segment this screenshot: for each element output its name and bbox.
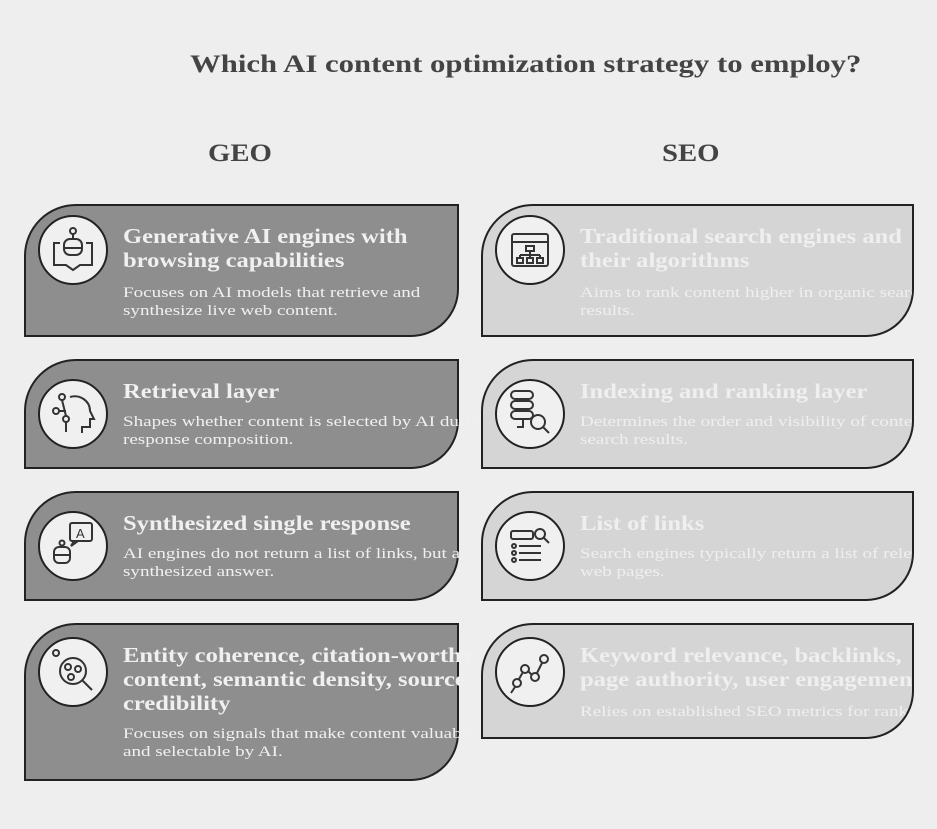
panel: GEO card 2 [24,359,459,469]
text: description: Shapes whether content is selected by AI during [123,414,490,430]
text: title: Keyword relevance, backlinks, [580,643,902,667]
text: title [580,224,902,272]
panel: SEO card 4 [481,623,914,739]
panel: GEO card 3 [24,491,459,601]
text: description [123,414,490,448]
text: title [123,643,474,715]
icon: robot book [38,215,108,285]
text: description [580,546,914,580]
icon: head network [38,379,108,449]
text: description: search results. [580,432,688,448]
text: title: browsing capabilities [123,248,344,272]
text: title: their algorithms [580,248,749,272]
text: title: Entity coherence, citation-worthy [123,643,474,667]
text: description: Focuses on signals that make content valuable [123,726,475,742]
icon: magnifier network [38,637,108,707]
text: description: AI engines do not return a list of links, but a [123,546,460,562]
panel: GEO card 1 [24,204,459,337]
icon: browser sitemap [495,215,565,285]
text: title: Synthesized single response [123,511,411,535]
icon: list search [495,511,565,581]
title: Which AI content optimization strategy to employ? [190,51,861,78]
text: description: Focuses on AI models that retrieve and [123,285,420,301]
text: description [123,726,475,760]
text: title: Retrieval layer [123,379,279,403]
icon: line graph [495,637,565,707]
text: description: response composition. [123,432,293,448]
text: description: web pages. [580,564,665,580]
text: title: page authority, user engagement [580,667,914,691]
text: title: Generative AI engines with [123,224,408,248]
text: description [580,285,914,319]
heading: SEO: SEO [662,140,720,167]
heading: GEO: GEO [208,140,272,167]
text: title [580,643,914,691]
text: title: Indexing and ranking layer [580,379,867,403]
text: description [123,285,420,319]
icon: robot chat: A [76,526,85,541]
text: description: and selectable by AI. [123,744,283,760]
text: title: credibility [123,691,230,715]
panel: SEO card 2 [481,359,914,469]
text: title: Traditional search engines and [580,224,902,248]
panel: GEO card 4 [24,623,459,781]
text: description [580,414,914,448]
text: title: List of links [580,511,704,535]
text: title: content, semantic density, source [123,667,466,691]
text: description: results. [580,303,635,319]
panel: SEO card 3 [481,491,914,601]
text: description [123,546,460,580]
text: title [123,224,408,272]
text: description: synthesize live web content. [123,303,338,319]
panel: SEO card 1 [481,204,914,337]
icon: database search [495,379,565,449]
text: description: synthesized answer. [123,564,274,580]
icon: robot chat [38,511,108,581]
